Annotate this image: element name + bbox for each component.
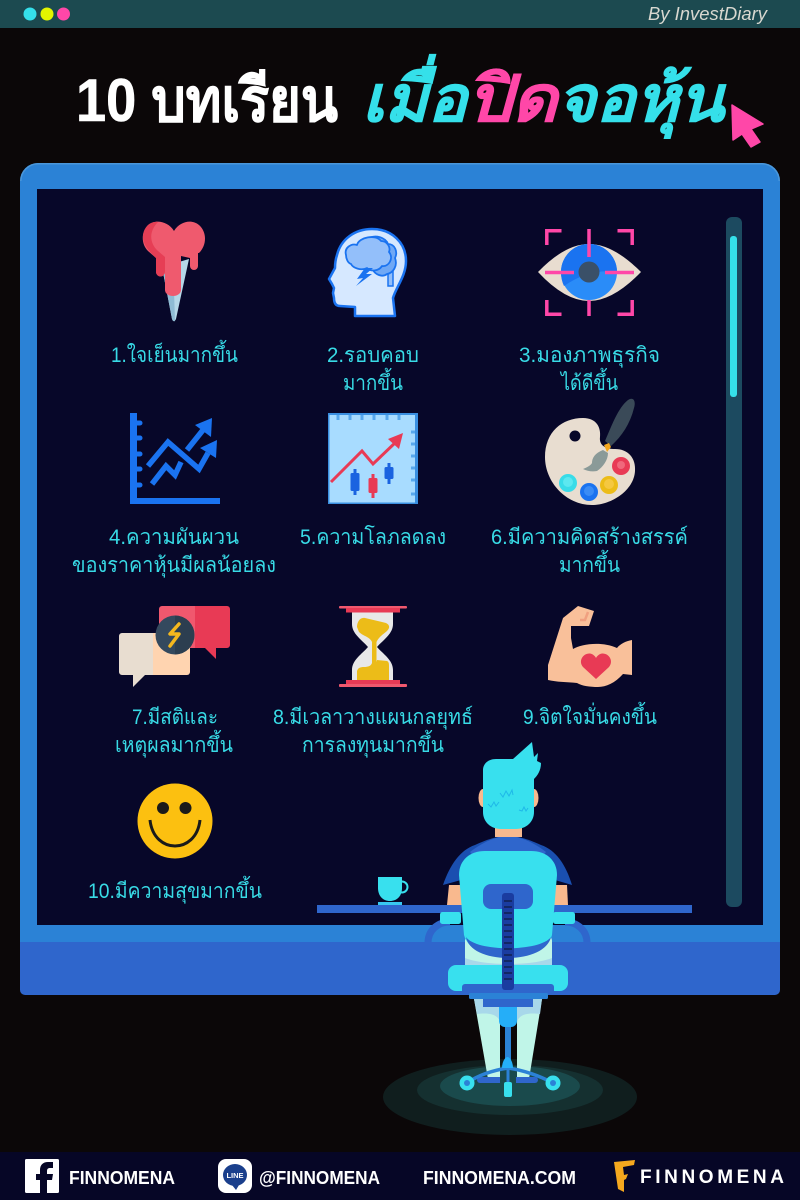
scrollbar: [726, 217, 742, 907]
icon: speech bubbles with bolt: [119, 606, 230, 687]
item 6: creativity: มากขึ้น: [559, 550, 620, 577]
item 6: creativity: [491, 399, 688, 577]
item 4: price swings: [72, 413, 276, 578]
label 8: 8.มีเวลาวางแผนกลยุทธ์: [273, 705, 473, 730]
title: 10 บทเรียน: [76, 67, 338, 134]
label 5: 5.ความโลภลดลง: [300, 525, 446, 549]
item 7: mindful: เหตุผลมากขึ้น: [115, 730, 233, 758]
label 9: 9.จิตใจมั่นคงขึ้น: [523, 702, 657, 729]
icon: head with storm cloud: [329, 229, 406, 316]
item 10: happy: [88, 784, 262, 904]
icon: line: [218, 1159, 252, 1193]
item 2: careful: [327, 229, 419, 395]
label 1: 1.ใจเย็นมากขึ้น: [111, 340, 238, 367]
icon: candlestick chart: [328, 413, 418, 504]
spine: [502, 893, 514, 990]
icon: chart with arrows: [130, 413, 220, 504]
item 3: business view: [519, 229, 660, 395]
icon: eye with target: [538, 229, 641, 316]
hair: [483, 742, 541, 829]
item 9: strong mind: [523, 606, 657, 729]
title: ปิด: [467, 63, 561, 135]
label 6: 6.มีความคิดสร้างสรรค์: [491, 525, 688, 549]
logo: FINNOMENA: [640, 1167, 784, 1188]
item 8: planning: การลงทุนมากขึ้น: [302, 730, 444, 758]
neck: [495, 825, 522, 837]
arms: [447, 885, 568, 905]
armrest pads: [440, 912, 575, 924]
item 1: cool heart: [111, 222, 238, 367]
wheel base: [460, 1057, 560, 1097]
title: จอหุ้น: [557, 63, 726, 139]
title: เมื่อ: [362, 54, 471, 135]
logo: [614, 1160, 784, 1192]
seat base: [462, 984, 554, 1061]
item 8: planning: [273, 606, 473, 758]
label 7: 7.มีสติและ: [132, 706, 218, 729]
desk with cup: [317, 877, 692, 913]
label 2: 2.รอบคอบ: [327, 344, 419, 367]
line handle: @FINNOMENA: [259, 1168, 380, 1188]
icon: line: LINE: [226, 1171, 244, 1180]
panel: monitor: [20, 163, 780, 995]
title: [76, 54, 726, 139]
footer bar: [0, 1152, 800, 1200]
label 4: 4.ความผันผวน: [109, 526, 239, 549]
icon: cursor: [732, 105, 763, 147]
person on office chair: [428, 742, 587, 1097]
icon: coffee cup: [378, 877, 408, 905]
item 2: careful: มากขึ้น: [343, 368, 403, 395]
item 7: mindful: [115, 606, 233, 758]
floor shadow: [383, 1059, 637, 1135]
icon: flexed arm with heart: [548, 606, 632, 687]
ears: [478, 789, 538, 807]
icon: smiley face: [138, 784, 212, 858]
item 5: less greed: [300, 413, 446, 549]
top bar: [0, 0, 800, 28]
label 3: 3.มองภาพธุรกิจ: [519, 344, 660, 368]
item 3: business view: ได้ดีขึ้น: [559, 368, 618, 395]
shoes: [477, 1077, 538, 1083]
facebook name: FINNOMENA: [69, 1168, 175, 1188]
chair seat: [448, 965, 568, 991]
label 10: 10.มีความสุขมากขึ้น: [88, 876, 262, 904]
chair back: [459, 851, 557, 958]
item 4: price swings: ของราคาหุ้นมีผลน้อยลง: [72, 554, 276, 578]
icon: paint palette: [545, 399, 635, 505]
legs: [474, 999, 542, 1079]
icon: hourglass: [339, 606, 407, 687]
mint torso sides: [465, 935, 552, 967]
top bar: By InvestDiary: [648, 4, 768, 24]
website: FINNOMENA.COM: [423, 1168, 576, 1188]
shirt: [443, 836, 572, 885]
icon: melting heart on icicle: [143, 222, 205, 321]
chair armrest arcs: [428, 922, 587, 943]
icon: facebook: [25, 1159, 59, 1193]
